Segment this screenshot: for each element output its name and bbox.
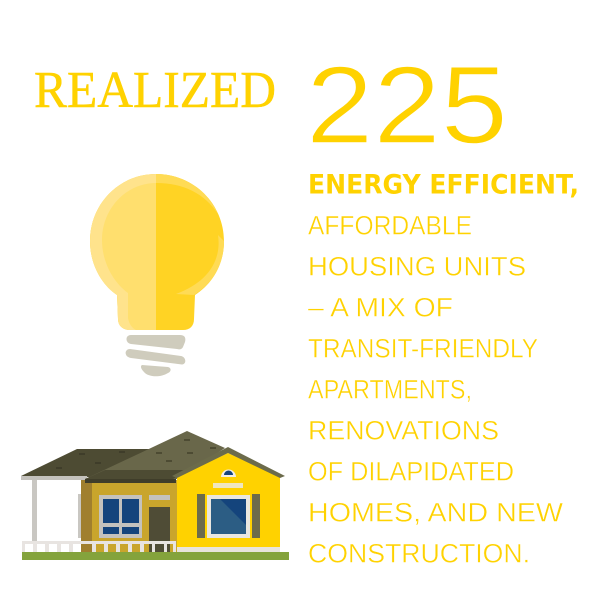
big number: 225: 225 (306, 44, 508, 167)
porch post (32, 480, 37, 542)
text block: description: AFFORDABLE (308, 210, 472, 240)
text block: description: HOUSING UNITS (308, 252, 526, 282)
bulb screw base (126, 335, 185, 376)
text block: description: ENERGY EFFICIENT, (308, 170, 579, 200)
text block: description: HOMES, AND NEW (308, 498, 564, 528)
door (149, 507, 170, 552)
illustration: house (21, 431, 289, 560)
text block: description: CONSTRUCTION. (308, 538, 530, 568)
main roof (85, 431, 225, 479)
text block: description: TRANSIT-FRIENDLY (308, 334, 538, 364)
text block: description: OF DILAPIDATED (308, 456, 514, 486)
icon: light bulb (90, 174, 224, 376)
gold wall (81, 480, 177, 552)
text block: description (308, 170, 579, 568)
left window (99, 495, 142, 538)
gable trim (172, 447, 285, 478)
gable vent (221, 470, 236, 477)
text block: description: – A MIX OF (308, 292, 453, 322)
text block: description: RENOVATIONS (308, 416, 499, 446)
shutters (197, 494, 205, 538)
heading: realized: REALIZED (34, 62, 276, 119)
back roof (21, 449, 150, 477)
grass (22, 552, 289, 560)
yellow front wall (177, 453, 280, 547)
porch railing (22, 541, 176, 552)
right window (207, 495, 250, 538)
text block: description: APARTMENTS, (308, 374, 472, 404)
